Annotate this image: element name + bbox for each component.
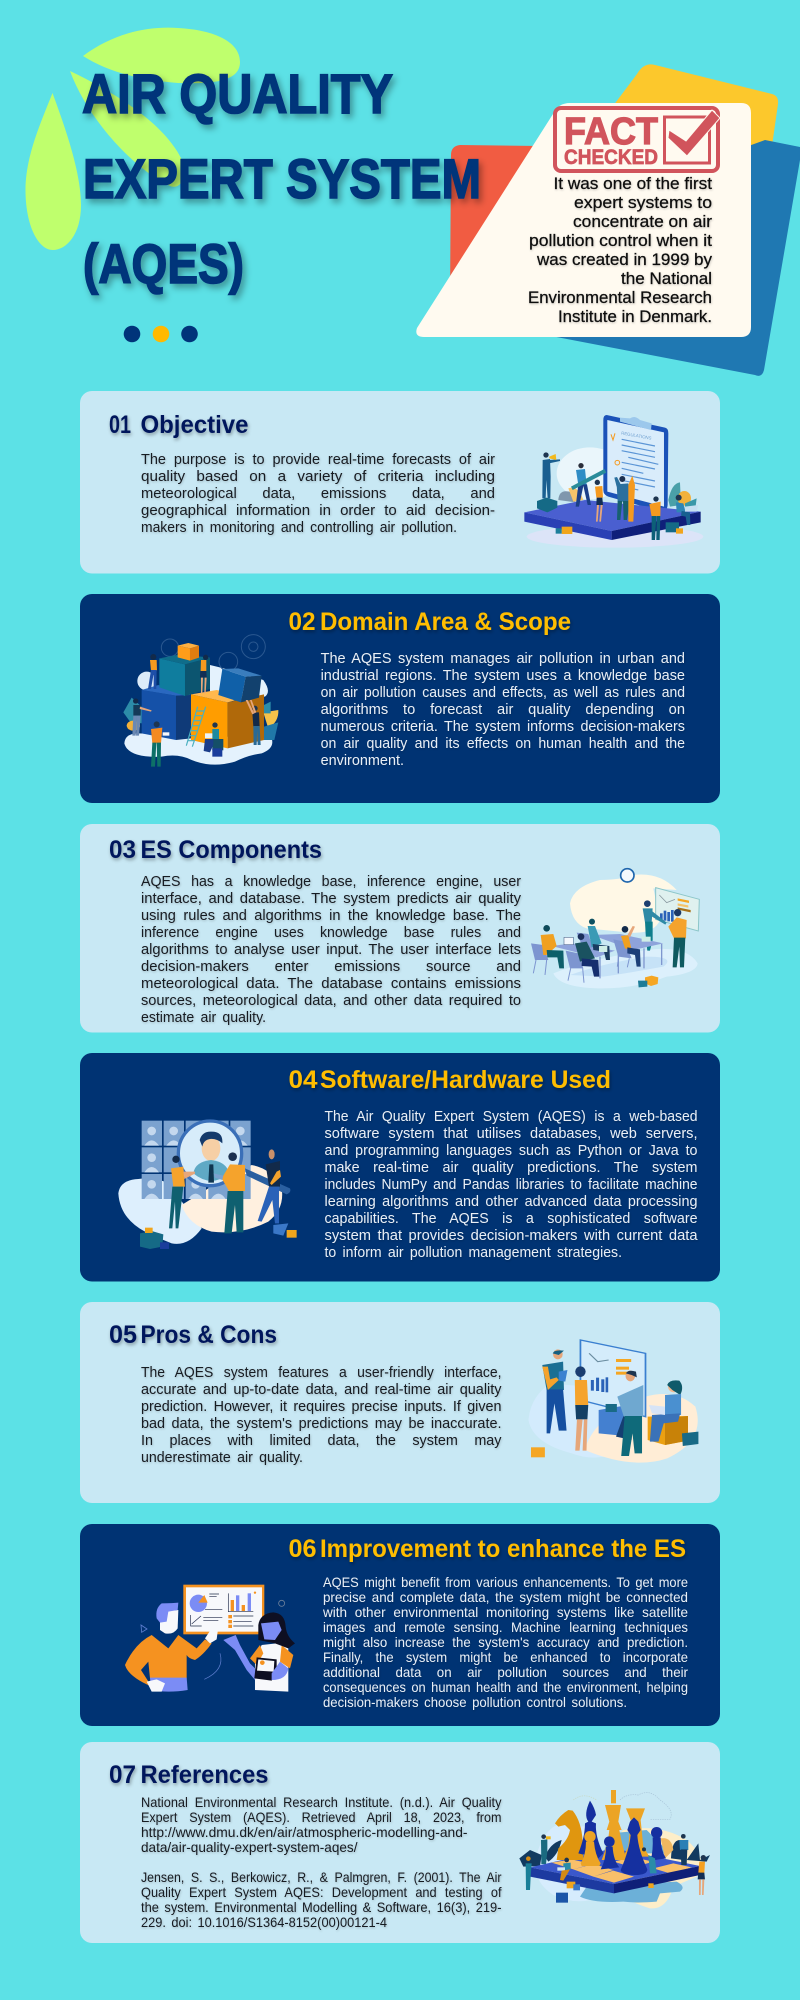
body text: bad data, the system's predictions may be inaccurate. xyxy=(141,1415,502,1432)
body text: makers in monitoring and controlling air pollution. xyxy=(141,519,457,536)
body text: meteorological data, emissions data, and xyxy=(141,485,495,502)
body text: might also increase the system's accuracy and prediction. xyxy=(323,1635,688,1650)
panel card xyxy=(80,391,720,574)
body text: In places with limited data, the system may xyxy=(141,1432,502,1449)
title: AIR QUALITY xyxy=(82,62,393,125)
body text: sources, meteorological data, and other data required to xyxy=(141,992,521,1009)
title: EXPERT SYSTEM xyxy=(83,147,481,210)
body text: interface, and database. The system predicts air quality xyxy=(141,890,521,907)
body text: Jensen, S. S., Berkowicz, R., & Palmgren, F. (2001). The Air xyxy=(141,1870,502,1885)
panel card xyxy=(80,1524,720,1726)
title: (AQES) xyxy=(83,232,244,295)
body text xyxy=(141,873,521,1026)
body text: on air quality and its effects on human health and the xyxy=(321,735,685,752)
panel: 06 improvement to enhance the ES xyxy=(80,1524,720,1726)
body text: Expert System (AQES). Retrieved April 18, 2023, from xyxy=(141,1810,502,1825)
heading: Pros & Cons xyxy=(140,1321,277,1349)
body text xyxy=(141,1364,502,1466)
heading: 03 xyxy=(109,836,136,864)
heading: 04 xyxy=(288,1066,318,1094)
body text: software system that utilises databases, web servers, xyxy=(324,1125,698,1142)
body text: decision-makers enter emissions source and xyxy=(141,958,521,975)
panel card xyxy=(80,1302,720,1503)
fact text: concentrate on air xyxy=(573,212,712,231)
title xyxy=(82,62,481,295)
body text: National Environmental Research Institute. (n.d.). Air Quality xyxy=(141,1795,502,1810)
body text xyxy=(324,1108,698,1261)
fact text: the National xyxy=(621,269,712,288)
body text: 229. doi: 10.1016/S1364-8152(00)00121-4 xyxy=(141,1915,387,1930)
body text: AQES has a knowledge base, inference engine, user xyxy=(141,873,521,890)
body text: inference engine uses knowledge base rules and xyxy=(141,924,521,941)
decorative leaves xyxy=(26,28,240,250)
body text: images and remote sensing. Machine learning techniques xyxy=(323,1620,688,1635)
body text: to inform air pollution management strategies. xyxy=(324,1244,622,1261)
panel: 07 references xyxy=(80,1742,720,1943)
panel card xyxy=(80,1742,720,1943)
body text: geographical information in order to aid decision- xyxy=(141,502,495,519)
three dots xyxy=(124,326,198,342)
illustration: magnifier over candidate portraits xyxy=(118,1121,297,1249)
body text: on air pollution causes and effects, as well as rules and xyxy=(321,684,685,701)
panel: 02 domain area and scope xyxy=(80,594,720,803)
body text: The Air Quality Expert System (AQES) is a web-based xyxy=(324,1108,698,1125)
panel: 04 software and hardware used xyxy=(80,1053,720,1282)
clipboard heading: REGULATIONS xyxy=(621,430,652,441)
panel card xyxy=(80,824,720,1032)
body text: data/air-quality-expert-system-aqes/ xyxy=(141,1840,358,1855)
body text: algorithms to analyse user input. The user interface lets xyxy=(141,941,521,958)
body text: and programming languages such as Python or Java to xyxy=(324,1142,698,1159)
body text xyxy=(321,650,685,769)
body text: the system. Environmental Modelling & Software, 16(3), 219- xyxy=(141,1900,502,1915)
body text xyxy=(141,1795,502,1930)
cream note xyxy=(416,103,751,337)
body text xyxy=(322,1575,688,1710)
heading: Improvement to enhance the ES xyxy=(320,1535,686,1563)
fact text: was created in 1999 by xyxy=(536,250,713,269)
body text: quality based on a variety of criteria including xyxy=(141,468,495,485)
body text: underestimate air quality. xyxy=(141,1449,303,1466)
panel: 03 ES components xyxy=(80,824,720,1032)
body text: with other environmental monitoring systems like satellite xyxy=(322,1605,688,1620)
yellow paper xyxy=(560,64,778,300)
heading: References xyxy=(140,1761,268,1789)
stamp: fact checked: FACT xyxy=(564,111,658,153)
heading: Domain Area & Scope xyxy=(320,608,571,636)
fact text: expert systems to xyxy=(574,193,712,212)
body text: system that provides decision-makers with current data xyxy=(324,1227,698,1244)
body text: The purpose is to provide real-time forecasts of air xyxy=(141,451,495,468)
fact text: Institute in Denmark. xyxy=(558,307,712,326)
body text: algorithms to forecast air quality depending on xyxy=(321,701,685,718)
red paper xyxy=(450,145,540,300)
body text: precise and complete data, the system might be connected xyxy=(323,1590,688,1605)
body text: http://www.dmu.dk/en/air/atmospheric-modelling-and- xyxy=(141,1825,468,1840)
body text: capabilities. The AQES is a sophisticated software xyxy=(324,1210,698,1227)
heading: 07 xyxy=(109,1761,136,1789)
body text: learning algorithms and other advanced data processing xyxy=(324,1193,698,1210)
body text: environment. xyxy=(321,752,404,769)
fact text: Environmental Research xyxy=(528,288,712,307)
panel card xyxy=(80,1053,720,1282)
body text: AQES might benefit from various enhancements. To get more xyxy=(323,1575,688,1590)
body text: estimate air quality. xyxy=(141,1009,266,1026)
stamp: fact checked: CHECKED xyxy=(564,146,658,169)
illustration: two people presenting charts xyxy=(125,1585,295,1692)
body text xyxy=(141,451,495,536)
body text: prediction. However, it requires precise inputs. If given xyxy=(141,1398,502,1415)
body text: numerous criteria. The system informs decision-makers xyxy=(321,718,685,735)
body text: includes NumPy and Pandas libraries to facilitate machine xyxy=(324,1176,698,1193)
body text: consequences on human health and the environment, helping xyxy=(323,1680,688,1695)
body text: accurate and up-to-date data, and real-time air quality xyxy=(141,1381,502,1398)
body text: Quality Expert System AQES: Development and testing of xyxy=(141,1885,502,1900)
body text: make real-time air quality predictions. The system xyxy=(324,1159,698,1176)
body text: meteorological data. The database contains emissions xyxy=(141,975,521,992)
body text: industrial regions. The system uses a knowledge base xyxy=(321,667,685,684)
body text: The AQES system manages air pollution in urban and xyxy=(321,650,685,667)
heading: Software/Hardware Used xyxy=(320,1066,611,1094)
heading: 06 xyxy=(288,1535,316,1563)
illustration: colleagues discussing a data screen xyxy=(528,1340,698,1463)
body text: Finally, the system might be enhanced to incorporate xyxy=(323,1650,688,1665)
heading: ES Components xyxy=(140,836,322,864)
body text: additional data on air pollution sources and their xyxy=(323,1665,688,1680)
fact text xyxy=(528,174,713,326)
heading: 02 xyxy=(288,608,316,636)
panel: 05 pros and cons xyxy=(80,1302,720,1503)
heading: Objective xyxy=(140,411,249,439)
stamp: fact checked xyxy=(555,108,720,171)
illustration: team at desks with a chart board xyxy=(531,869,699,988)
blue paper xyxy=(520,140,800,376)
fact text: It was one of the first xyxy=(554,174,712,193)
illustration: chess pieces on a board xyxy=(519,1790,710,1908)
illustration: people around a regulations clipboard xyxy=(524,415,703,548)
fact card xyxy=(416,64,800,376)
fact text: pollution control when it xyxy=(529,231,712,250)
heading: 05 xyxy=(109,1321,137,1349)
panel card xyxy=(80,594,720,803)
body text: using rules and algorithms in the knowledge base. The xyxy=(141,907,521,924)
illustration: people stacking blocks xyxy=(123,635,278,767)
body text: decision-makers choose pollution control solutions. xyxy=(323,1695,627,1710)
panel: 01 objective xyxy=(80,391,720,574)
heading: 01 xyxy=(109,411,131,439)
body text: The AQES system features a user-friendly interface, xyxy=(141,1364,502,1381)
